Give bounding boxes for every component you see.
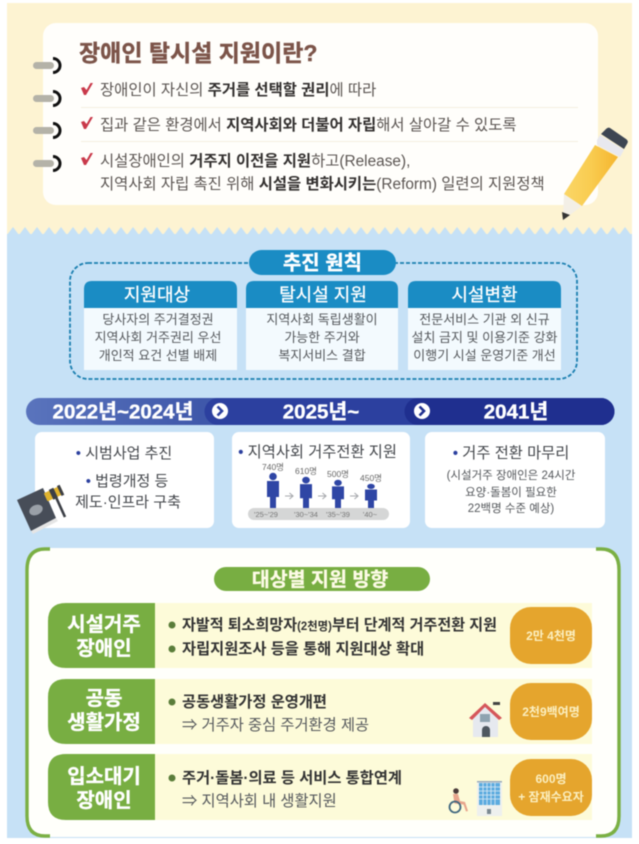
row: group homes: ⇒ 거주자 중심 주거환경 제공: [182, 717, 369, 734]
row: group homes: 공동: [86, 688, 122, 710]
icon: wheelchair user: [450, 788, 468, 812]
chart: people pictogram: 450명: [360, 473, 382, 483]
card: deinstitutional support: 탈시설 지원: [279, 285, 367, 305]
row: residents of facilities: 시설거주: [67, 613, 141, 636]
card: facility change: 시설변환: [451, 285, 518, 305]
card: deinstitutional support: 가능한 주거와: [284, 330, 360, 345]
row: group homes: 2천9백여명: [522, 705, 580, 719]
text: item 3: [81, 152, 545, 193]
heading: principles pill: [249, 250, 396, 275]
row: waiting for admission: ⇒ 지역사회 내 생활지원: [182, 793, 337, 810]
row: group homes: [48, 679, 592, 744]
panel: definition note card: [33, 23, 598, 205]
row: group homes: 공동생활가정 운영개편: [182, 694, 327, 711]
card: support targets: 당사자의 주거결정권: [102, 312, 214, 327]
card: 2025 onward: • 지역사회 거주전환 지원: [238, 444, 397, 461]
row: group homes: 생활가정: [67, 711, 141, 734]
text: item 3: 시설장애인의 거주지 이전을 지원하고(Release),: [100, 152, 410, 170]
card: deinstitutional support: 지역사회 독립생활이: [266, 312, 378, 327]
card: 2041: [425, 432, 605, 528]
panel: promotion principles: [70, 250, 577, 379]
heading: support direction pill: [214, 567, 430, 591]
timeline bar: [26, 398, 614, 425]
icon: house: [469, 702, 502, 737]
card: support targets: 지원대상: [124, 285, 190, 305]
background: blue section: [7, 234, 632, 838]
panel: support direction by target: [27, 548, 619, 837]
icon: arrow circle: [414, 403, 430, 419]
text: item 2: 집과 같은 환경에서 지역사회와 더불어 자립해서 살아갈 수 있도록: [100, 116, 517, 134]
card: support targets: [84, 281, 237, 370]
text: item 3: 지역사회 자립 촉진 위해 시설을 변화시키는(Reform) 일련의 지원정책: [100, 175, 545, 193]
icon: apartment building: [477, 781, 502, 816]
chart: people pictogram: '40~: [363, 510, 378, 519]
chart: people pictogram: '25~'29: [254, 510, 278, 519]
row: residents of facilities: 장애인: [76, 637, 132, 660]
row: waiting for admission: 장애인: [76, 789, 132, 812]
card: deinstitutional support: 복지서비스 결합: [278, 348, 366, 363]
row: residents of facilities: 자립지원조사 등을 통해 지원대상 확대: [182, 641, 424, 658]
card: facility change: 이행기 시설 운영기준 개선: [413, 348, 556, 363]
icon: notebook rings: [33, 58, 60, 170]
card: 2041: • 거주 전환 마무리: [453, 445, 569, 462]
timeline bar: 2025년~: [283, 400, 359, 424]
card: 2041: (시설거주 장애인은 24시간: [447, 469, 576, 482]
chart: people pictogram: 740명: [262, 462, 284, 472]
chart: people pictogram: 610명: [295, 466, 317, 476]
chart: people pictogram: '35~'39: [326, 510, 350, 519]
card: support targets: 지역사회 거주권리 우선: [95, 330, 221, 345]
icon: law book and gavel: [17, 485, 65, 534]
row: waiting for admission: 600명: [535, 772, 567, 786]
row: residents of facilities: [48, 603, 592, 668]
card: 2041: 22백명 수준 예상): [468, 502, 554, 515]
timeline bar: 2022년~2024년: [53, 400, 193, 424]
card: facility change: 설치 금지 및 이용기준 강화: [411, 330, 558, 345]
card: facility change: [408, 281, 561, 370]
icon: pencil: [562, 128, 628, 220]
title: 장애인 탈시설 지원이란?: [79, 40, 317, 66]
heading: support direction pill: 대상별 지원 방향: [252, 569, 388, 591]
chart: people pictogram: [248, 462, 389, 520]
card: 2022-2024: • 법령개정 등: [86, 473, 168, 490]
row: waiting for admission: 입소대기: [67, 765, 141, 788]
icon: arrow circle: [212, 403, 228, 419]
row: residents of facilities: 2만 4천명: [526, 629, 576, 643]
card: 2041: 요양·돌봄이 필요한: [465, 486, 557, 499]
chart: people pictogram: 500명: [327, 469, 349, 479]
text: item 1: 장애인이 자신의 주거를 선택할 권리에 따라: [100, 81, 376, 99]
row: waiting for admission: [48, 754, 592, 820]
chart: people pictogram: '30~'34: [294, 510, 318, 519]
card: support targets: 개인적 요건 선별 배제: [99, 348, 217, 363]
card: deinstitutional support: [246, 281, 398, 370]
timeline bar: 2041년: [484, 400, 548, 424]
card: 2022-2024: 제도·인프라 구축: [75, 494, 181, 511]
row: waiting for admission: 주거·돌봄·의료 등 서비스 통합연계: [182, 770, 402, 787]
heading: principles pill: 추진 원칙: [283, 252, 362, 274]
card: 2025 onward: [232, 432, 410, 528]
background: yellow top section: [7, 3, 632, 235]
row: waiting for admission: + 잠재수요자: [518, 789, 584, 804]
card: 2022-2024: [35, 432, 214, 528]
card: facility change: 전문서비스 기관 외 신규: [419, 312, 550, 327]
row: residents of facilities: 자발적 퇴소희망자(2천명)부터 단계적 거주전환 지원: [182, 617, 497, 634]
card: 2022-2024: • 시범사업 추진: [76, 445, 172, 462]
